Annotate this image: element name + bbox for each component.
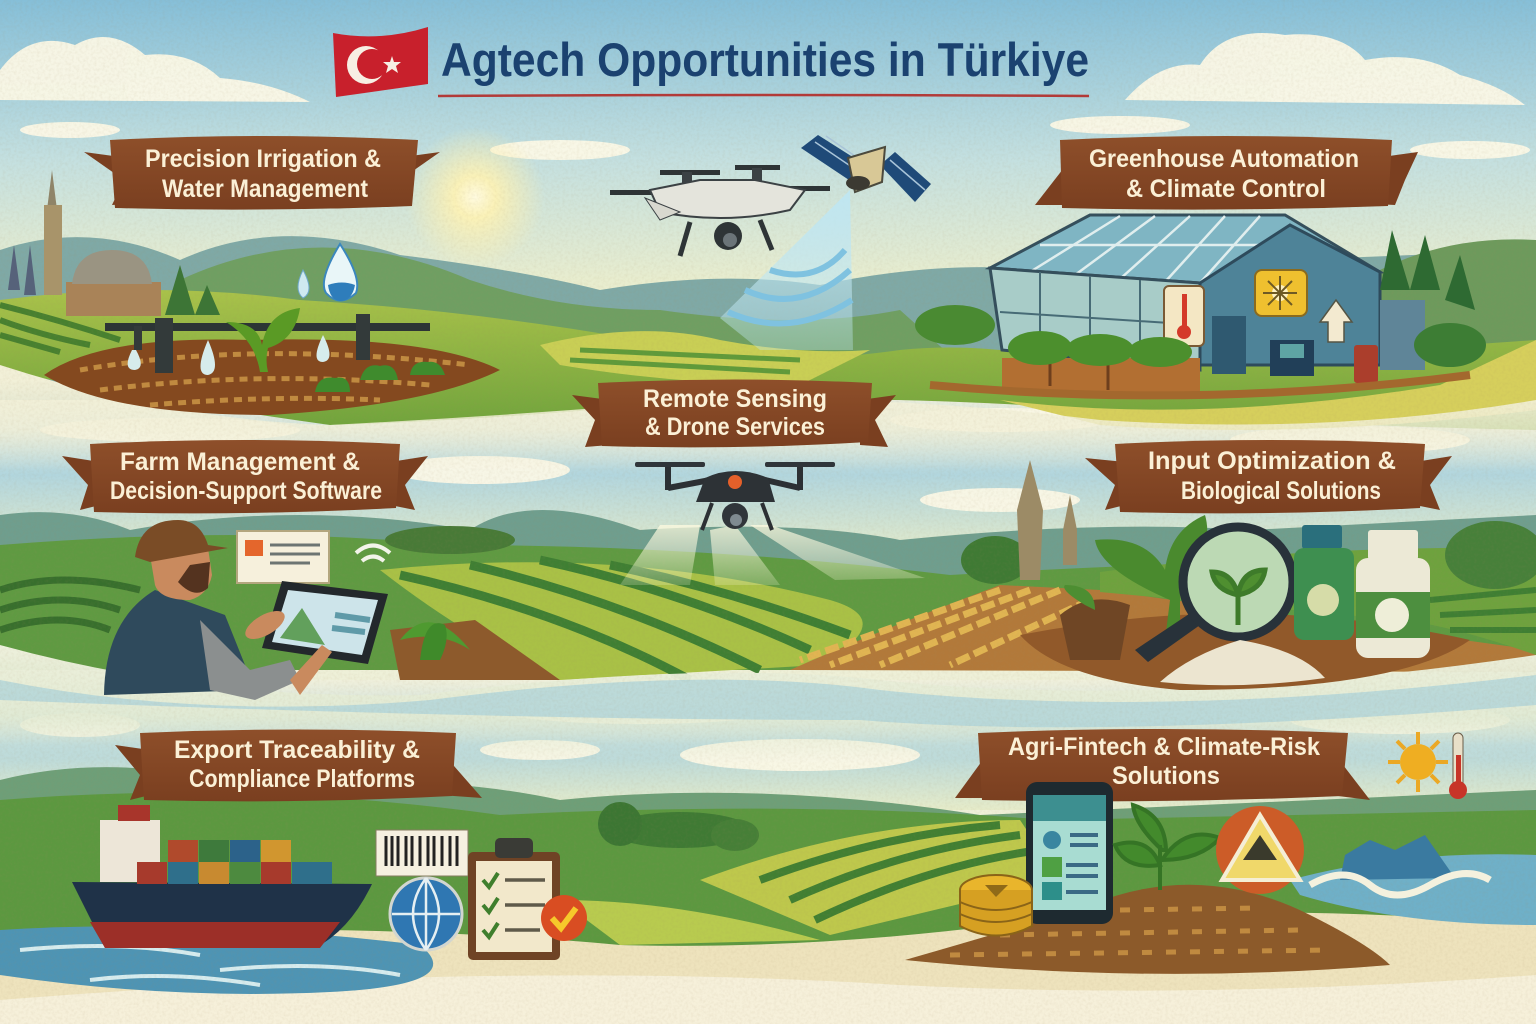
icon: smartphone [1026,782,1113,924]
icon: wifi [356,546,390,561]
band 1: hills and fields [0,236,1536,430]
banner: input optimization: Input Optimization & [1148,447,1396,475]
icon: globe [390,878,462,950]
minarets [1017,460,1077,580]
banner: remote sensing [572,380,896,447]
illustration: greenhouse [915,215,1486,395]
illustration: input optimization [1017,460,1470,690]
banner: greenhouse: & Climate Control [1126,175,1326,203]
banner: export traceability: Export Traceability & [174,736,420,764]
icon: thermometer [1449,733,1467,799]
icon: sun sign [1255,270,1307,316]
granule pile [1160,640,1325,685]
wave divider 2 [0,645,1536,760]
banner: farm management: Farm Management & [120,448,360,476]
banner: greenhouse [1035,136,1418,210]
illustration: cargo ship [72,805,587,960]
illustration: agri-fintech [905,732,1490,974]
title: Agtech Opportunities in Türkiye [441,33,1089,86]
icon: bottle white [1356,530,1430,658]
clouds [0,33,1530,771]
illustration: irrigation [44,244,500,415]
banner: precision irrigation [84,136,440,210]
illustration: satellite beam [720,190,853,350]
soil clods [950,908,1330,955]
banner: agri-fintech: Agri-Fintech & Climate-Risk [1008,733,1320,761]
illustration: small drone and light beams [620,462,925,585]
icon: thermometer sign [1164,286,1204,346]
banner: export traceability [115,730,482,801]
icon: large drone [610,165,830,256]
banner: input optimization: Biological Solutions [1181,477,1381,505]
banner: precision irrigation: Water Management [162,175,369,203]
title group [333,27,1089,97]
tablet [262,581,388,664]
icon: warning badge [1216,806,1304,894]
banner: remote sensing: Remote Sensing [643,385,827,413]
illustration: farmer with tablet [104,520,560,700]
banner: agri-fintech: Solutions [1112,762,1220,790]
sun [405,127,545,267]
icon: satellite [801,135,931,202]
icon: bottle blue [1294,525,1354,640]
band 2: hills and fields [0,510,1536,680]
icon: water drops [298,244,357,301]
icon: coins [960,875,1032,936]
wave divider 1 [0,365,1536,470]
icon: clipboard [468,838,587,960]
icon: sun [1388,732,1448,792]
banner: agri-fintech [955,729,1370,801]
band 3: hills and fields [0,767,1536,950]
ground: sand and water [0,854,1536,1024]
illustration: mosque on hill [8,170,220,316]
banner: export traceability: Compliance Platforms [189,765,415,793]
screen card [237,531,329,583]
Turkish flag [333,27,428,97]
banner: farm management [62,440,428,513]
icon: magnifier [1135,527,1293,662]
banner: greenhouse: Greenhouse Automation [1089,145,1359,173]
icon: waves and mountains [1310,835,1490,895]
banner: remote sensing: & Drone Services [645,413,825,441]
banner: farm management: Decision-Support Software [110,477,382,505]
banner: precision irrigation: Precision Irrigation & [145,145,381,173]
icon: barcode [376,830,468,876]
icon: seedling [1115,805,1220,890]
icon: vent arrow [1320,300,1352,342]
banner: input optimization [1085,440,1452,513]
